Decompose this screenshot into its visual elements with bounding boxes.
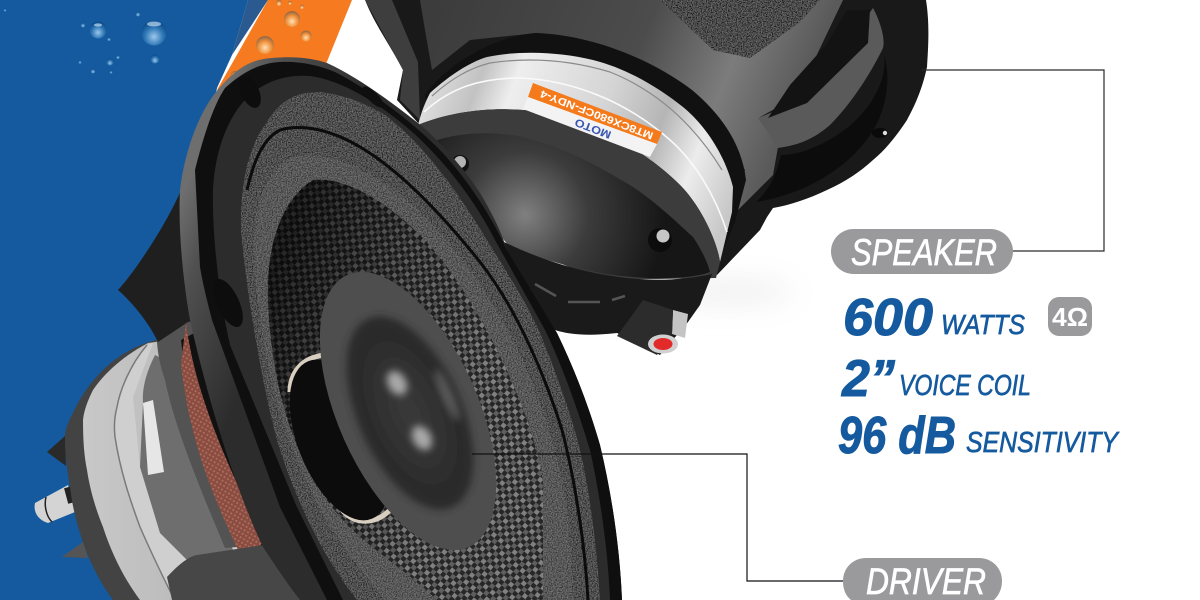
frame indent top xyxy=(235,73,265,111)
frame indent upper right xyxy=(360,84,386,110)
front magnet groove xyxy=(114,345,173,597)
spec: sensitivity xyxy=(838,407,1120,465)
rear basket left leg xyxy=(365,0,420,120)
front terminal connector xyxy=(35,485,75,523)
rear inner surround shadow xyxy=(756,55,887,202)
spec: 600 watts: WATTS xyxy=(941,309,1025,340)
surround xyxy=(241,92,600,600)
front terminal pin upper xyxy=(47,436,66,466)
motor bolt left xyxy=(451,155,469,173)
spec: voice coil: 2” xyxy=(841,350,895,408)
cone carbon weave xyxy=(268,180,543,600)
frame black outer edge xyxy=(195,62,622,600)
basket arm xyxy=(157,320,262,548)
dust cap dome xyxy=(321,298,499,528)
rear spoke window xyxy=(768,10,870,118)
rear terminal red cap xyxy=(648,334,678,354)
rear magnet chrome ring xyxy=(418,53,733,262)
rear motor back plate xyxy=(437,133,710,278)
spec: voice coil: VOICE COIL xyxy=(899,370,1031,402)
cone shade xyxy=(268,180,543,600)
chrome groove lower xyxy=(424,78,727,232)
pole glint lower xyxy=(342,510,390,521)
water droplets on blue xyxy=(4,8,166,74)
lower bracket xyxy=(167,545,305,600)
rear spoke strip lower xyxy=(758,8,884,148)
surround groove xyxy=(247,127,588,600)
rear cone mesh xyxy=(660,0,820,58)
floor shadow under rear speaker xyxy=(655,279,795,305)
surround inner zone xyxy=(254,155,573,600)
back bracket upper xyxy=(118,188,198,342)
background: dark blue stripe xyxy=(232,0,268,55)
callout line: driver xyxy=(472,454,843,581)
callout line: speaker xyxy=(922,70,1104,251)
rear terminal base xyxy=(617,300,673,355)
speaker label: SPEAKER xyxy=(851,232,997,273)
rear terminal metal xyxy=(672,310,688,338)
model label orange xyxy=(528,83,662,144)
spec: sensitivity: SENSITIVITY xyxy=(966,427,1120,459)
spec: voice coil xyxy=(841,350,1031,408)
front frame flange xyxy=(213,76,610,600)
model label white xyxy=(523,97,657,157)
spec: 600 watts xyxy=(843,289,1025,347)
brand text: MOTO xyxy=(573,115,613,140)
front magnet chrome outer band xyxy=(83,340,270,600)
dust cap highlight streak xyxy=(431,367,463,423)
rim bolt xyxy=(872,128,888,138)
pole glint upper xyxy=(290,355,324,392)
dust cap highlight upper xyxy=(383,367,411,399)
front frame rim gray xyxy=(180,57,622,600)
red mesh cone back xyxy=(181,322,264,551)
dark gap behind mesh xyxy=(181,330,264,552)
spec: sensitivity: 96 dB xyxy=(838,407,956,465)
front speaker xyxy=(35,57,622,600)
rear basket base xyxy=(365,0,928,275)
4 ohm badge xyxy=(1048,297,1092,336)
rear basket body xyxy=(420,0,843,215)
front magnet recess xyxy=(140,355,235,560)
dust cap flange xyxy=(283,246,533,576)
front magnet back rim xyxy=(65,340,200,600)
4 ohm badge: 4Ω xyxy=(1052,302,1088,332)
model label text: MT8CX680CF-NDY-4 xyxy=(539,87,655,141)
frame indent lower left xyxy=(207,275,249,331)
rear housing logo xyxy=(535,284,625,302)
pole neck xyxy=(269,345,411,535)
rear motor rim xyxy=(418,109,720,280)
motor bolt right xyxy=(648,228,672,252)
front magnet shine xyxy=(143,400,164,475)
spec: 600 watts: 600 xyxy=(843,289,933,347)
rear lower housing xyxy=(500,240,712,355)
chrome groove upper xyxy=(432,60,722,170)
dust cap highlight lower xyxy=(408,422,436,454)
background: blue panel xyxy=(0,0,248,600)
background: orange stripe xyxy=(217,0,352,90)
rear chrome surrounding ring xyxy=(425,33,746,262)
water droplets on orange xyxy=(231,0,312,79)
front magnet chrome inner band xyxy=(114,343,200,597)
front terminal pin lower xyxy=(62,542,88,558)
rear speaker xyxy=(365,0,928,355)
